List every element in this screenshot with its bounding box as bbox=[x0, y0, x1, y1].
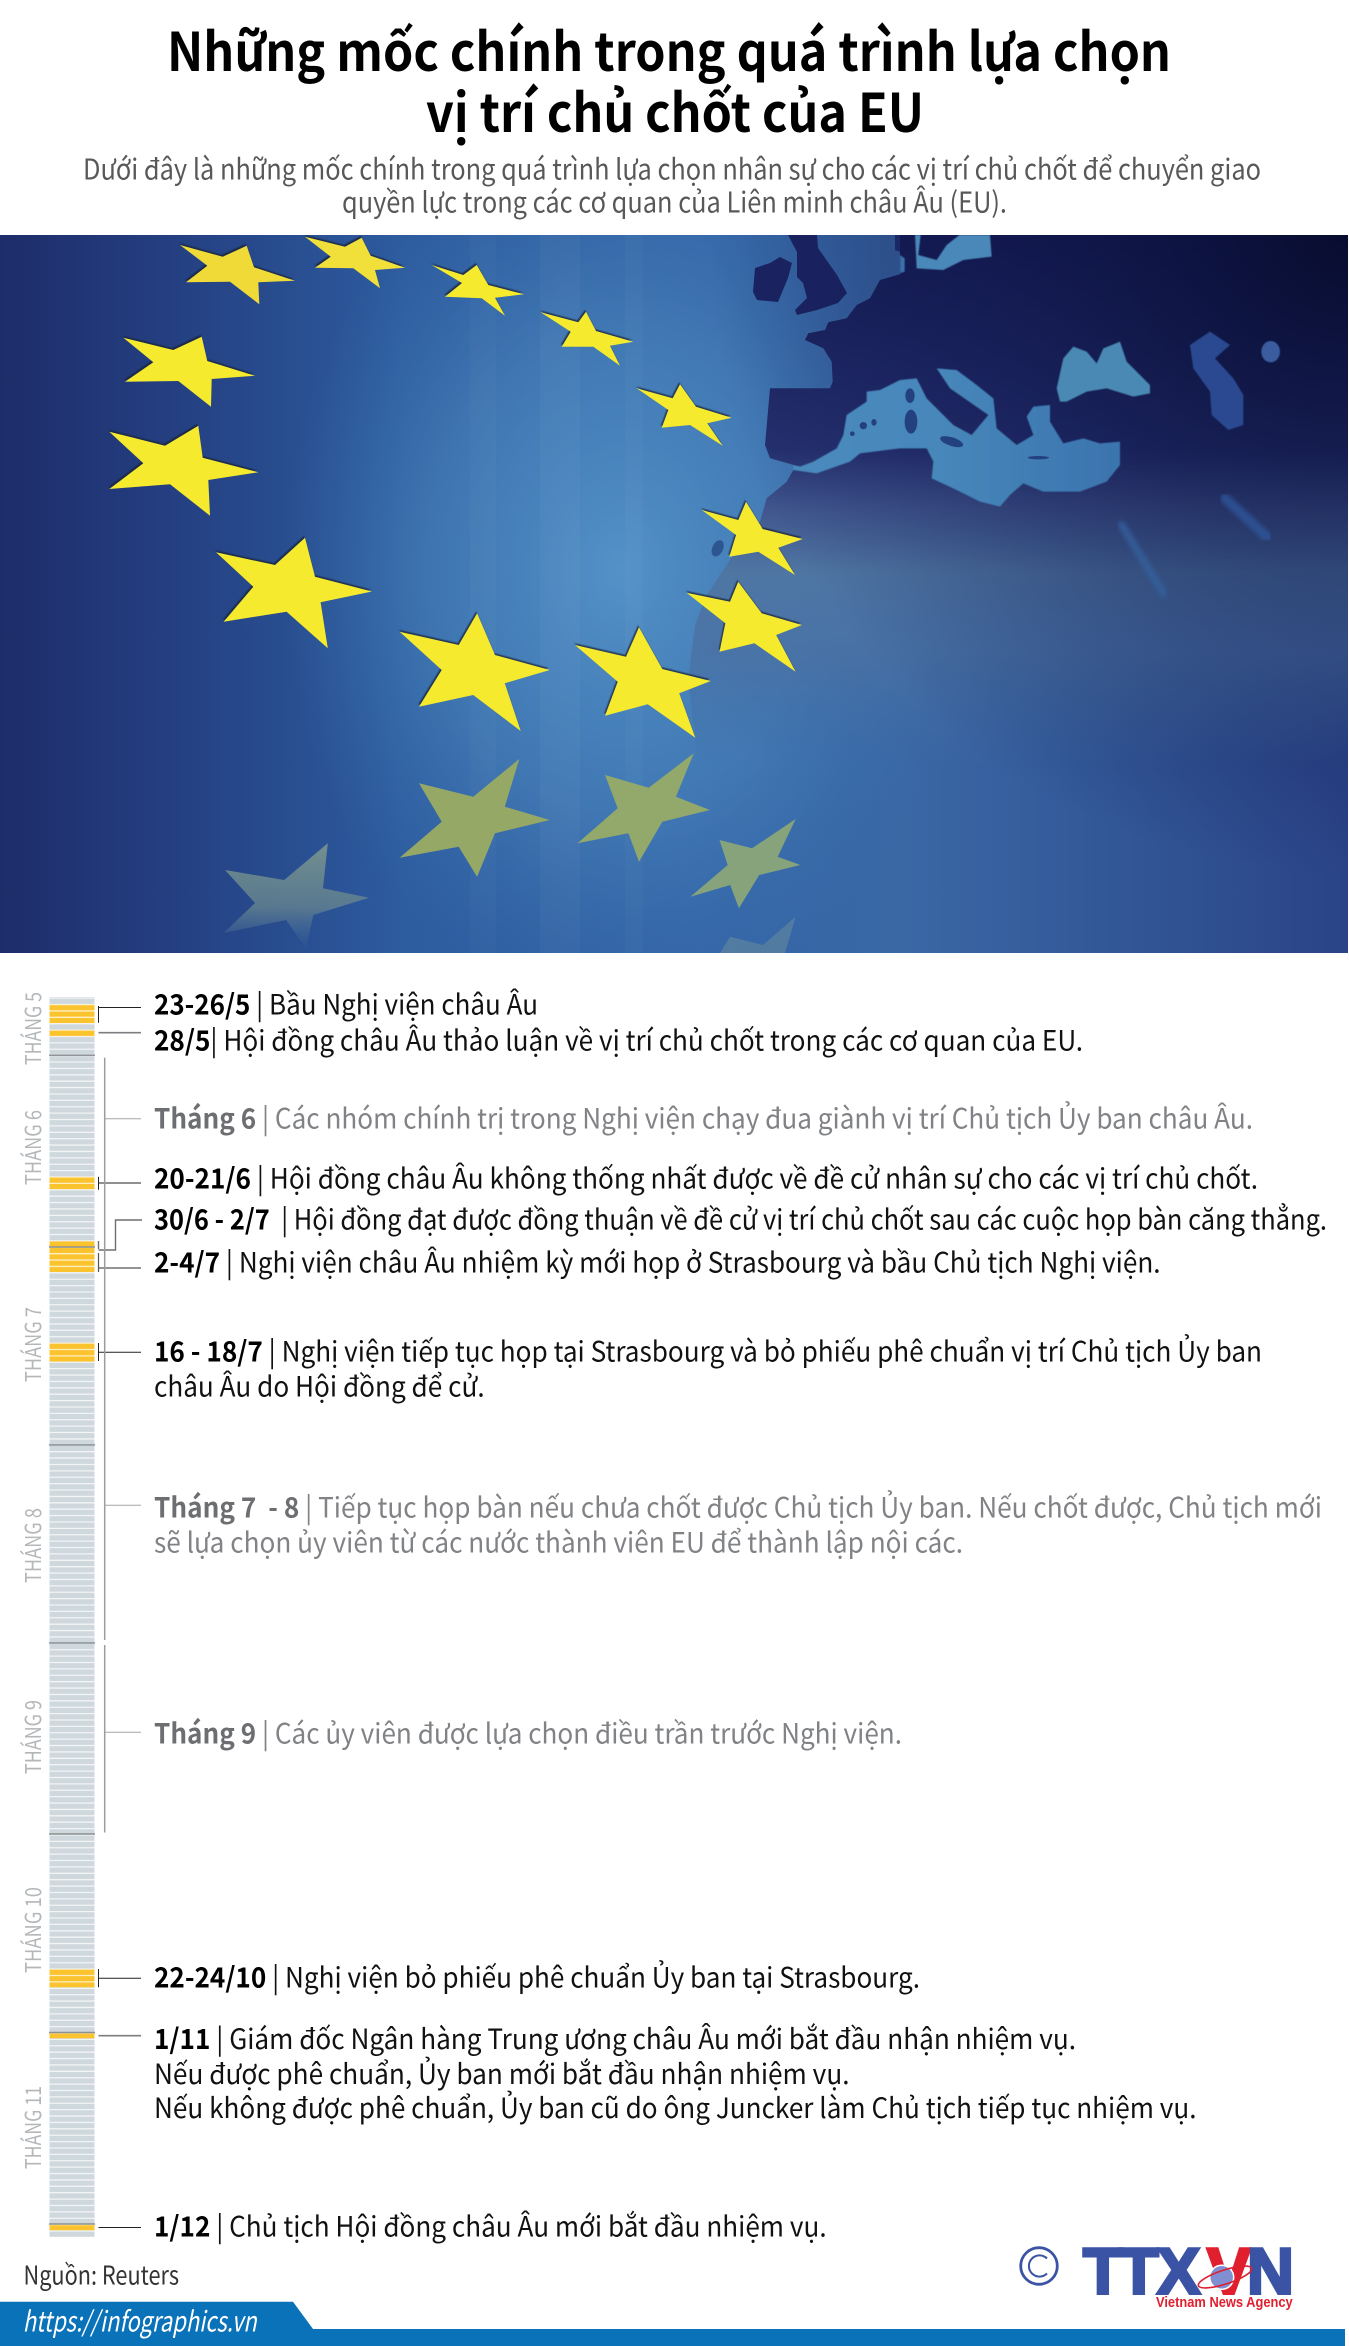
event: 28/5: 28/5| Hội đồng châu Âu thảo luận về vị trí chủ chốt trong các cơ quan của EU. bbox=[154, 1020, 1083, 1060]
month labels: THÁNG 8 bbox=[16, 1508, 48, 1583]
event: 16-18/7 bbox=[154, 1330, 1262, 1406]
icon: copyright bbox=[1021, 2248, 1057, 2284]
event: 1/11 bbox=[154, 2018, 1196, 2127]
month labels: THÁNG 11 bbox=[16, 2086, 48, 2169]
month labels: THÁNG 7 bbox=[16, 1307, 48, 1382]
event: 1/11: Nếu không được phê chuẩn, Ủy ban cũ do ông Juncker làm Chủ tịch tiếp tục nhiệm vụ. bbox=[154, 2087, 1196, 2127]
event: 20-21/6: 20-21/6 | Hội đồng châu Âu không thống nhất được về đề cử nhân sự cho các vị trí chủ chốt. bbox=[154, 1158, 1258, 1198]
month labels: THÁNG 10 bbox=[16, 1887, 48, 1973]
event: Tháng 9: Tháng 9 | Các ủy viên được lựa chọn điều trần trước Nghị viện. bbox=[154, 1712, 902, 1752]
event: 1/12: 1/12 | Chủ tịch Hội đồng châu Âu mới bắt đầu nhiệm vụ. bbox=[154, 2206, 827, 2246]
event: Tháng 7-8: sẽ lựa chọn ủy viên từ các nước thành viên EU để thành lập nội các. bbox=[154, 1522, 963, 1562]
footer band bbox=[0, 2300, 1345, 2346]
event: 23-26/5: 23-26/5 | Bầu Nghị viện châu Âu bbox=[154, 984, 538, 1024]
title: Những mốc chính trong quá trình lựa chọn bbox=[167, 11, 1171, 87]
title: vị trí chủ chốt của EU bbox=[426, 72, 924, 148]
title bbox=[167, 11, 1171, 148]
connector lines bbox=[98, 1006, 142, 2228]
event: 1/11: Nếu được phê chuẩn, Ủy ban mới bắt đầu nhận nhiệm vụ. bbox=[154, 2053, 850, 2093]
calendar bar bbox=[49, 997, 95, 2237]
panel: timeline bbox=[16, 984, 1327, 2246]
event: 16-18/7: châu Âu do Hội đồng để cử. bbox=[154, 1366, 485, 1406]
hero image: EU flag stars over map bbox=[0, 235, 1348, 953]
source note: Nguồn: Reuters bbox=[24, 2256, 179, 2292]
month labels bbox=[16, 992, 48, 2169]
month labels: THÁNG 5 bbox=[16, 992, 48, 1065]
event: 16-18/7: 16 - 18/7 | Nghị viện tiếp tục họp tại Strasbourg và bỏ phiếu phê chuẩn vị trí Chủ tịch Ủy ban bbox=[154, 1330, 1262, 1370]
subtitle text block: quyền lực trong các cơ quan của Liên minh châu Âu (EU). bbox=[342, 180, 1007, 222]
footer url: https://infographics.vn bbox=[23, 2300, 258, 2340]
event: Tháng 6: Tháng 6 | Các nhóm chính trị trong Nghị viện chạy đua giành vị trí Chủ tịch Ủy ban châu Âu. bbox=[154, 1097, 1253, 1137]
subtitle text block bbox=[83, 148, 1261, 222]
month labels: THÁNG 9 bbox=[16, 1700, 48, 1774]
event: 22-24/10: 22-24/10 | Nghị viện bỏ phiếu phê chuẩn Ủy ban tại Strasbourg. bbox=[154, 1957, 920, 1997]
month labels: THÁNG 6 bbox=[16, 1110, 48, 1185]
event: 2-4/7: 2-4/7 | Nghị viện châu Âu nhiệm kỳ mới họp ở Strasbourg và bầu Chủ tịch Nghị viện. bbox=[154, 1241, 1161, 1281]
event: Tháng 7-8 bbox=[154, 1487, 1322, 1562]
event: 1/11: 1/11 | Giám đốc Ngân hàng Trung ương châu Âu mới bắt đầu nhận nhiệm vụ. bbox=[154, 2018, 1076, 2058]
logo: TTXVN: TTXVN bbox=[1083, 2234, 1294, 2308]
logo: TTXVN: Vietnam News Agency bbox=[1156, 2295, 1293, 2311]
